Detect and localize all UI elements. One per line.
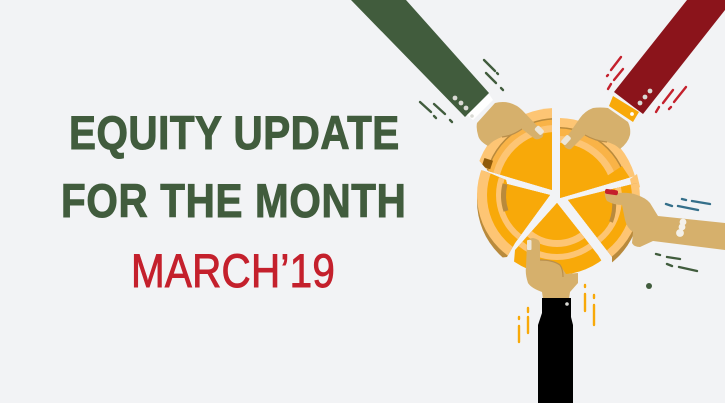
nail <box>527 240 532 250</box>
orange cuff <box>609 96 639 122</box>
motion lines: green right <box>656 254 697 271</box>
slice: bottom <box>514 203 602 274</box>
nail <box>560 134 572 146</box>
slice: top left <box>480 108 552 190</box>
motion lines: green lower <box>420 102 452 122</box>
arm: green sleeve <box>351 0 493 120</box>
motion lines: green upper <box>484 60 503 90</box>
bracelet <box>676 219 686 237</box>
heading line 2: FOR THE MONTH <box>61 175 406 228</box>
motion lines: yellow left <box>519 308 528 342</box>
heading line 1: EQUITY UPDATE <box>69 107 399 160</box>
arm: black sleeve <box>538 298 573 403</box>
motion lines: blue <box>666 199 710 210</box>
arm: red sleeve <box>609 0 725 122</box>
motion lines: red left <box>607 57 623 89</box>
motion lines: yellow right <box>585 285 594 325</box>
sleeve buttons <box>638 89 652 105</box>
pie chart <box>474 108 640 279</box>
slice: right <box>568 183 640 262</box>
white cuff <box>467 94 493 120</box>
slice: top right crust piece <box>630 174 640 192</box>
green dot <box>646 283 652 289</box>
slice: top right <box>560 118 635 198</box>
hand: top right <box>560 108 630 149</box>
date: MARCH’19 <box>131 245 335 298</box>
motion lines: red right <box>656 87 686 112</box>
nail <box>534 125 545 136</box>
nail <box>605 189 618 195</box>
hand: bottom <box>526 238 578 299</box>
hand and arm: right <box>605 189 725 250</box>
hand: top left <box>477 102 545 146</box>
slice: left <box>477 170 550 258</box>
sleeve buttons <box>453 96 474 118</box>
title <box>61 107 406 298</box>
